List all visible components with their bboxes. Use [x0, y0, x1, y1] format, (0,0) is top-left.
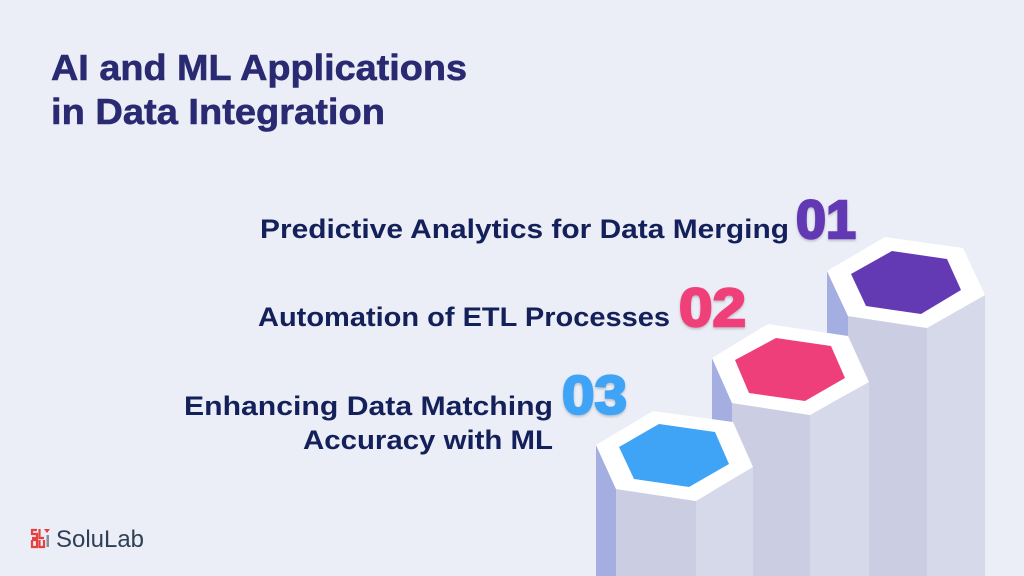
icon: logo mark [32, 529, 50, 547]
column 1: purple, tallest [827, 237, 985, 576]
title: AI and ML Applications [51, 47, 467, 88]
title [51, 47, 467, 132]
number 02: 02 [679, 278, 746, 338]
label 03: Accuracy with ML [303, 425, 553, 455]
title: in Data Integration [51, 91, 385, 132]
label 03 [184, 391, 553, 455]
number 03: 03 [562, 366, 627, 426]
number 01: 01 [796, 190, 856, 250]
logo: SoluLab: SoluLab [56, 526, 144, 553]
column 3: blue, shortest [596, 411, 753, 576]
column 2: pink, middle [712, 324, 869, 576]
label 03: Enhancing Data Matching [184, 391, 553, 421]
label 02: Automation of ETL Processes [258, 302, 670, 332]
label 01: Predictive Analytics for Data Merging [260, 214, 789, 244]
